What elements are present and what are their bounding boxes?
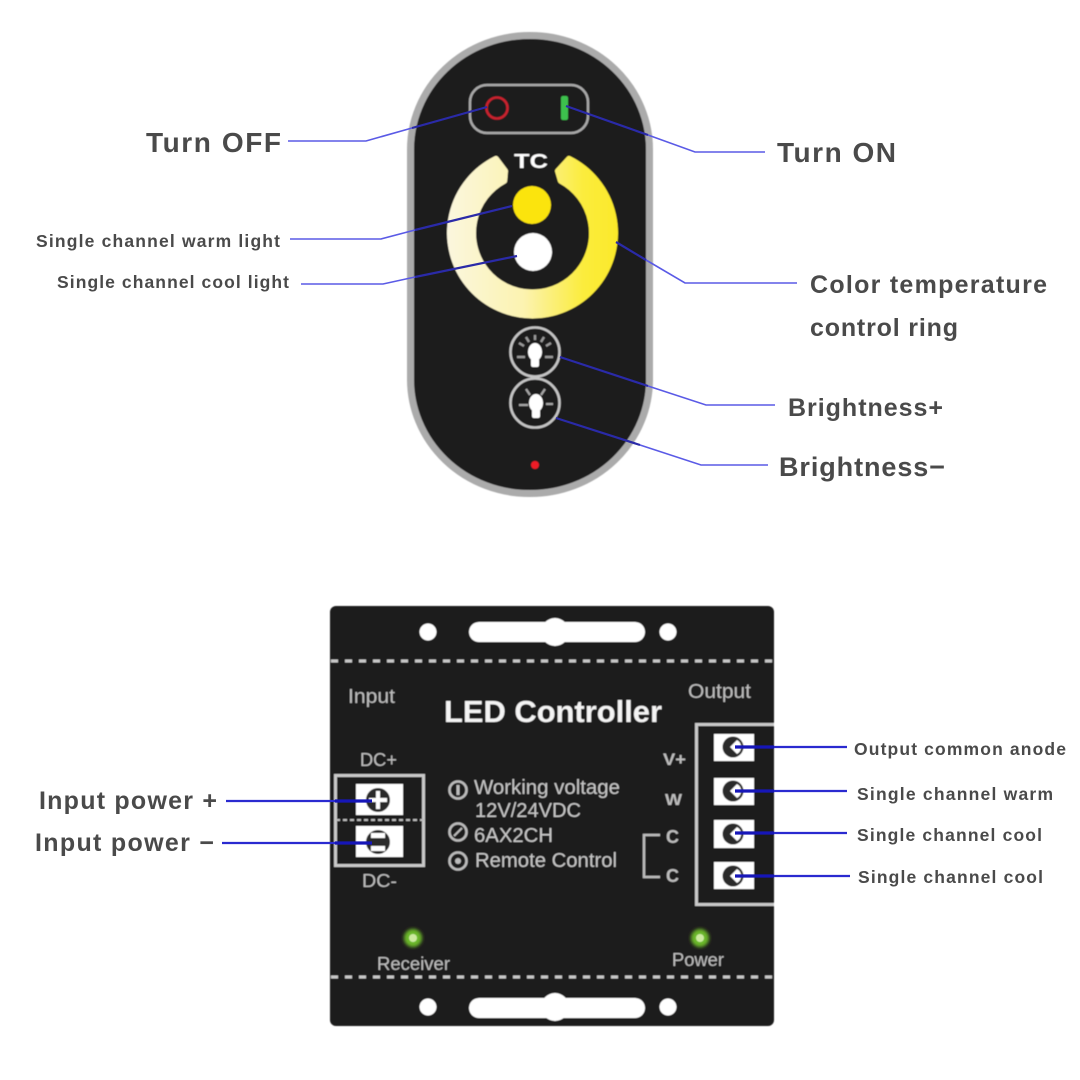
panel: LED controller [330, 606, 774, 1026]
icon: brightness minus [510, 378, 560, 428]
heading: LED Controller: LED Controller [444, 695, 662, 729]
specification list: Remote Control [475, 850, 617, 872]
specification list: 12V/24VDC [475, 800, 581, 822]
label: DC+: DC+ [360, 750, 397, 770]
specification list: 6AX2CH [474, 825, 553, 847]
output labels: W [665, 792, 683, 809]
specification list [450, 777, 620, 872]
label: Input power minus: Input power − [35, 829, 214, 857]
label: Input power plus: Input power + [39, 787, 217, 815]
label: Turn ON: Turn ON [777, 137, 896, 168]
remote body [410, 36, 650, 494]
label: Power: Power [672, 949, 724, 970]
icon: on button [561, 96, 568, 120]
icon: cool light button [514, 233, 552, 271]
remote brand TC: TC [514, 151, 548, 173]
label: DC-: DC- [362, 870, 397, 891]
label: single channel cool 1: Single channel cool [857, 825, 1042, 845]
label: single channel warm: Single channel warm [857, 784, 1053, 804]
mounting holes top [420, 618, 676, 646]
label: Input: Input [348, 686, 395, 708]
label: Turn OFF: Turn OFF [146, 127, 281, 158]
indicator: power LED [691, 929, 709, 947]
output labels: V+ [663, 750, 686, 769]
mounting holes bottom [420, 993, 676, 1021]
callout lines: remote inner segments [412, 106, 648, 445]
bracket linking C outputs [644, 835, 660, 877]
output labels: C [666, 866, 679, 886]
icon: brightness plus [510, 328, 560, 376]
panel: remote control [410, 36, 650, 494]
specification list: Working voltage [474, 777, 620, 799]
label: Output: Output [688, 680, 751, 703]
label: output common anode: Output common anode [854, 739, 1066, 759]
callout lines: remote [288, 128, 797, 465]
input terminal block [336, 776, 424, 866]
indicator: receiver LED [404, 929, 422, 947]
output labels [663, 750, 686, 886]
output labels: C [666, 827, 679, 847]
label: cool light: Single channel cool light [57, 272, 289, 292]
label: Brightness plus: Brightness+ [788, 394, 943, 422]
icon: warm light button [513, 186, 551, 224]
callout lines: controller outer segments [222, 747, 850, 876]
output terminal block [696, 724, 774, 904]
label: Brightness minus: Brightness− [779, 452, 945, 482]
label: warm light: Single channel warm light [36, 231, 280, 251]
text: control ring [810, 314, 958, 342]
icon: off button [486, 98, 508, 118]
color temperature ring [450, 159, 615, 315]
callout lines: controller inner segments [335, 747, 774, 876]
label: color temperature ring: Color temperature [810, 271, 1047, 299]
label: Receiver: Receiver [377, 953, 450, 974]
power button panel [470, 85, 588, 133]
indicator: red LED [531, 461, 539, 469]
controller body [330, 606, 774, 1026]
label: single channel cool 2: Single channel cool [858, 867, 1043, 887]
